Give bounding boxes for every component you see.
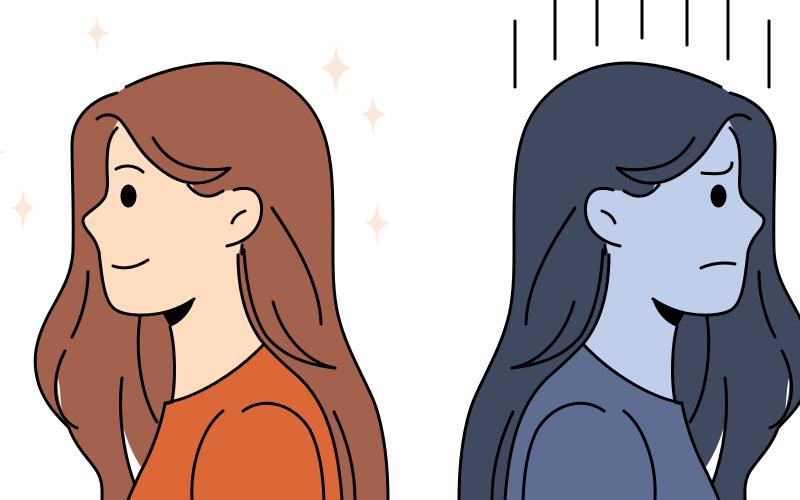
hair gaps — [58, 378, 143, 483]
figure: sad woman — [459, 63, 800, 500]
hair gaps — [704, 378, 789, 483]
ink outlines — [459, 63, 800, 500]
face and neck — [583, 119, 764, 410]
eye — [710, 184, 726, 208]
chin shadow — [652, 298, 684, 327]
hair — [35, 63, 388, 500]
face and neck — [83, 119, 264, 410]
shirt — [128, 344, 342, 500]
sparkles around happy woman — [0, 14, 390, 245]
eye — [120, 184, 136, 208]
figure: happy woman — [35, 63, 388, 500]
rain lines above sad woman — [515, 0, 769, 87]
shirt — [505, 344, 719, 500]
ink outlines — [35, 63, 388, 500]
hair — [459, 63, 800, 500]
chin shadow — [163, 298, 195, 327]
